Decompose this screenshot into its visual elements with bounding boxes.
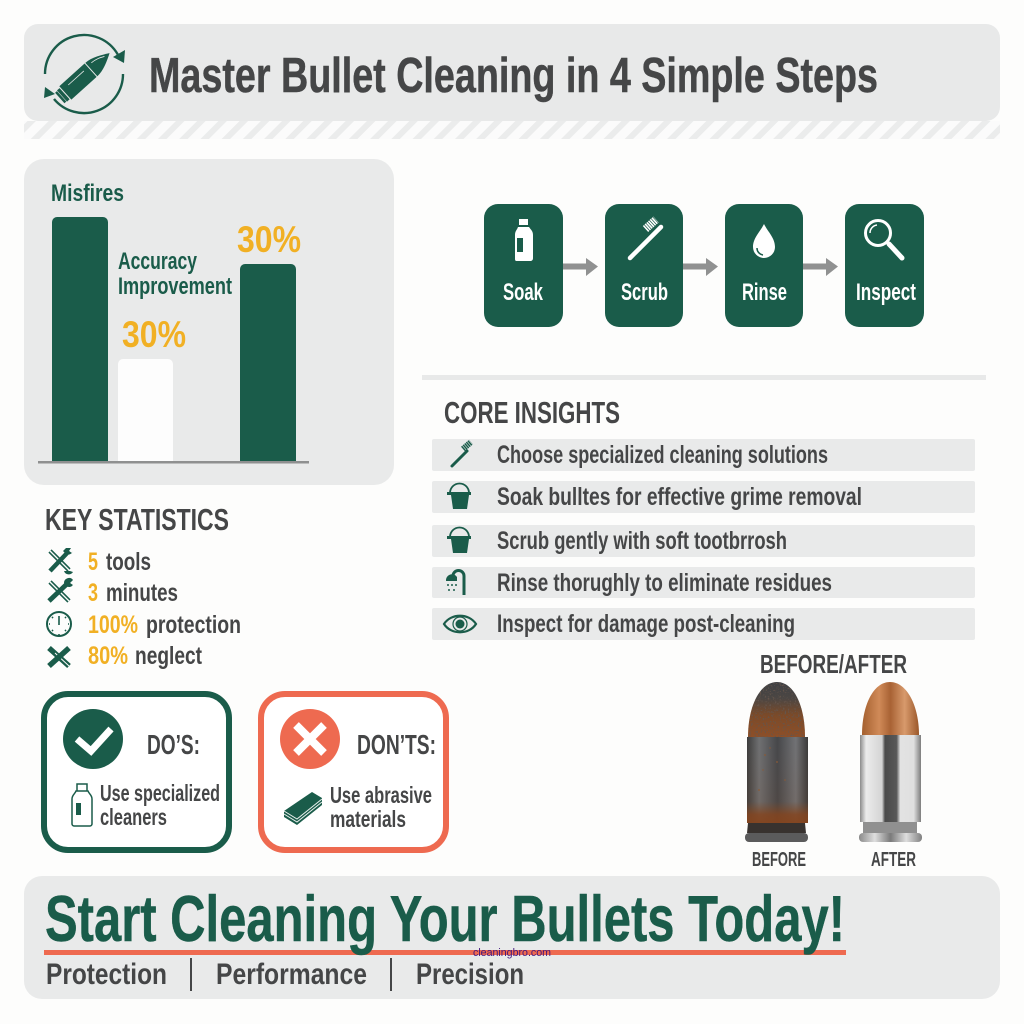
heading: don'ts: DON’TS: [357, 729, 436, 760]
text: use abrasive materials: materials [330, 806, 406, 832]
stat: 3 minutes: 3 [88, 579, 98, 607]
step: rinse: Rinse [742, 279, 787, 306]
bar: misfires [52, 217, 108, 462]
icon: bullet with circular arrows [44, 35, 125, 113]
label: before: BEFORE [752, 849, 806, 871]
label: accuracy improvement: Accuracy [118, 248, 197, 275]
insight row 5: Inspect for damage post-cleaning [497, 610, 795, 638]
heading: core insights: CORE INSIGHTS [444, 395, 620, 430]
heading: do's: DO’S: [147, 729, 200, 760]
insight row 3: Scrub gently with soft tootbrrosh [497, 527, 787, 555]
tagline: Precision [416, 958, 524, 991]
tagline [46, 958, 524, 991]
panel: don'ts [261, 694, 446, 850]
stat: 3 minutes: minutes [106, 579, 178, 607]
stat: 100% protection [47, 611, 241, 639]
stat: 100% protection: 100% [88, 611, 138, 639]
panel: call to action [24, 876, 1000, 999]
arrow [803, 258, 838, 276]
step: rinse [725, 204, 803, 327]
insight row 4: Rinse thorughly to eliminate residues [497, 569, 832, 597]
insight row 2: Soak bulltes for effective grime removal [497, 483, 862, 511]
step: inspect [845, 204, 924, 327]
bar: third [240, 264, 296, 462]
icon: eraser block [284, 792, 322, 825]
image: dirty bullet [745, 682, 808, 842]
panel: do's [44, 694, 229, 850]
arrow [563, 258, 598, 276]
text: use abrasive materials: Use abrasive [330, 782, 432, 808]
stat: 100% protection: protection [146, 611, 241, 639]
panel: bar chart [24, 159, 394, 485]
icon: bottle [72, 784, 92, 826]
heading: key statistics: KEY STATISTICS [45, 502, 229, 537]
text: use specialized cleaners: cleaners [100, 804, 167, 830]
stat: 3 minutes [49, 578, 178, 607]
step: scrub [605, 204, 683, 327]
value: 30% center: 30% [122, 314, 186, 355]
stat: 5 tools: 5 [88, 548, 98, 576]
text: use specialized cleaners: Use specialized [100, 780, 220, 806]
stat: 5 tools: tools [106, 548, 151, 576]
insight row 3 [432, 525, 975, 557]
value: 30% right: 30% [237, 219, 301, 260]
tagline: Protection [46, 958, 167, 991]
stat: 80% neglect [49, 642, 203, 670]
label: accuracy improvement [118, 248, 232, 300]
icon: check [63, 709, 123, 769]
header panel [24, 24, 1000, 121]
step: inspect: Inspect [856, 279, 916, 306]
stat: 80% neglect: 80% [88, 642, 128, 670]
watermark: cleaningbro.com [473, 947, 551, 959]
bar: accuracy improvement [118, 359, 173, 462]
step: scrub: Scrub [621, 279, 668, 306]
process steps [484, 204, 924, 327]
underline [44, 950, 846, 955]
panel: core insights [432, 395, 975, 640]
image: clean bullet [859, 682, 922, 842]
icon: cross [280, 709, 340, 769]
arrow [683, 258, 718, 276]
stat: 80% neglect: neglect [135, 642, 203, 670]
label: after: AFTER [871, 849, 916, 871]
label: accuracy improvement: Improvement [118, 273, 232, 300]
label: misfires: Misfires [51, 180, 124, 207]
step: soak: Soak [503, 279, 543, 306]
insight row 1: Choose specialized cleaning solutions [497, 441, 828, 469]
text: use abrasive materials [330, 782, 432, 832]
tagline: Performance [216, 958, 367, 991]
stat: 5 tools [50, 548, 151, 576]
insight row 5 [432, 608, 975, 640]
step: soak [484, 204, 563, 327]
heading: before/after: BEFORE/AFTER [760, 649, 907, 679]
panel: key statistics [45, 502, 241, 670]
panel: before/after [745, 649, 922, 871]
text: use specialized cleaners [100, 780, 220, 830]
